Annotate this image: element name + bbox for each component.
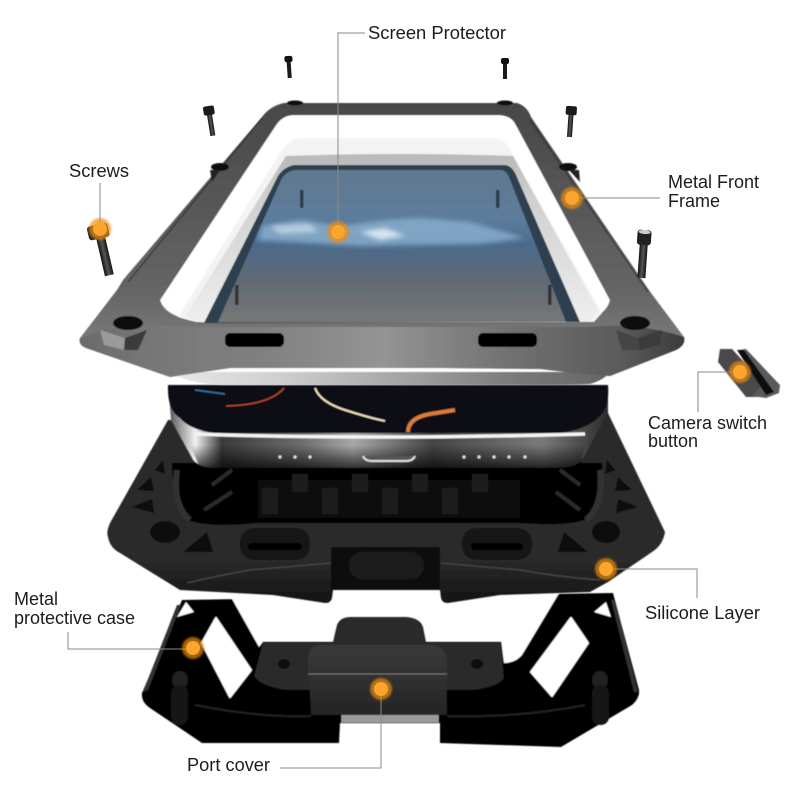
metal protective case	[142, 590, 639, 747]
screw right large	[634, 230, 652, 278]
label: camera switch button: Camera switch	[648, 413, 767, 433]
dot: screen protector	[327, 221, 349, 243]
leader: silicone layer	[606, 569, 697, 598]
label: metal front frame: Frame	[668, 191, 720, 211]
dot: port cover	[370, 678, 392, 700]
frame underside lip	[170, 372, 610, 385]
label: metal protective case: Metal	[14, 589, 58, 609]
leader: screws	[99, 183, 101, 228]
speaker dots	[278, 455, 527, 459]
screw left large	[86, 222, 119, 278]
screws	[86, 56, 652, 278]
screw upper left	[203, 105, 218, 137]
label: screen protector: Screen Protector	[368, 23, 506, 43]
metal front frame	[80, 100, 684, 385]
screen protector	[178, 138, 602, 323]
label: screws: Screws	[69, 161, 129, 181]
label: metal front frame: Metal Front	[668, 172, 759, 192]
leader lines	[68, 33, 740, 768]
label: camera switch button: button	[648, 431, 698, 451]
screw upper right	[564, 106, 577, 137]
frame button slots	[225, 333, 284, 347]
silicone button slots	[240, 528, 310, 560]
dot: silicone layer	[595, 558, 617, 580]
phone	[168, 385, 608, 468]
label: silicone layer: Silicone Layer	[645, 603, 760, 623]
leader: metal front frame	[572, 197, 660, 199]
callout dots	[89, 187, 751, 700]
dot: metal front frame	[561, 187, 583, 209]
leader: screen protector	[338, 33, 365, 232]
silicone mounting holes	[150, 521, 180, 543]
camera switch button	[718, 349, 780, 398]
label: metal protective case: protective case	[14, 608, 135, 628]
label: port cover: Port cover	[187, 755, 270, 775]
leader: port cover	[280, 689, 381, 768]
leader: camera switch	[698, 372, 740, 412]
port cover	[254, 617, 504, 723]
leader: metal protective case	[68, 632, 193, 649]
mountain image on screen	[258, 218, 525, 246]
silicone layer	[107, 413, 665, 603]
dot: screws	[89, 218, 111, 240]
dot: camera switch	[729, 361, 751, 383]
dot: metal protective case	[182, 637, 204, 659]
screw top left	[284, 56, 294, 78]
screw top right	[501, 58, 509, 79]
frame screw holes	[113, 316, 143, 330]
